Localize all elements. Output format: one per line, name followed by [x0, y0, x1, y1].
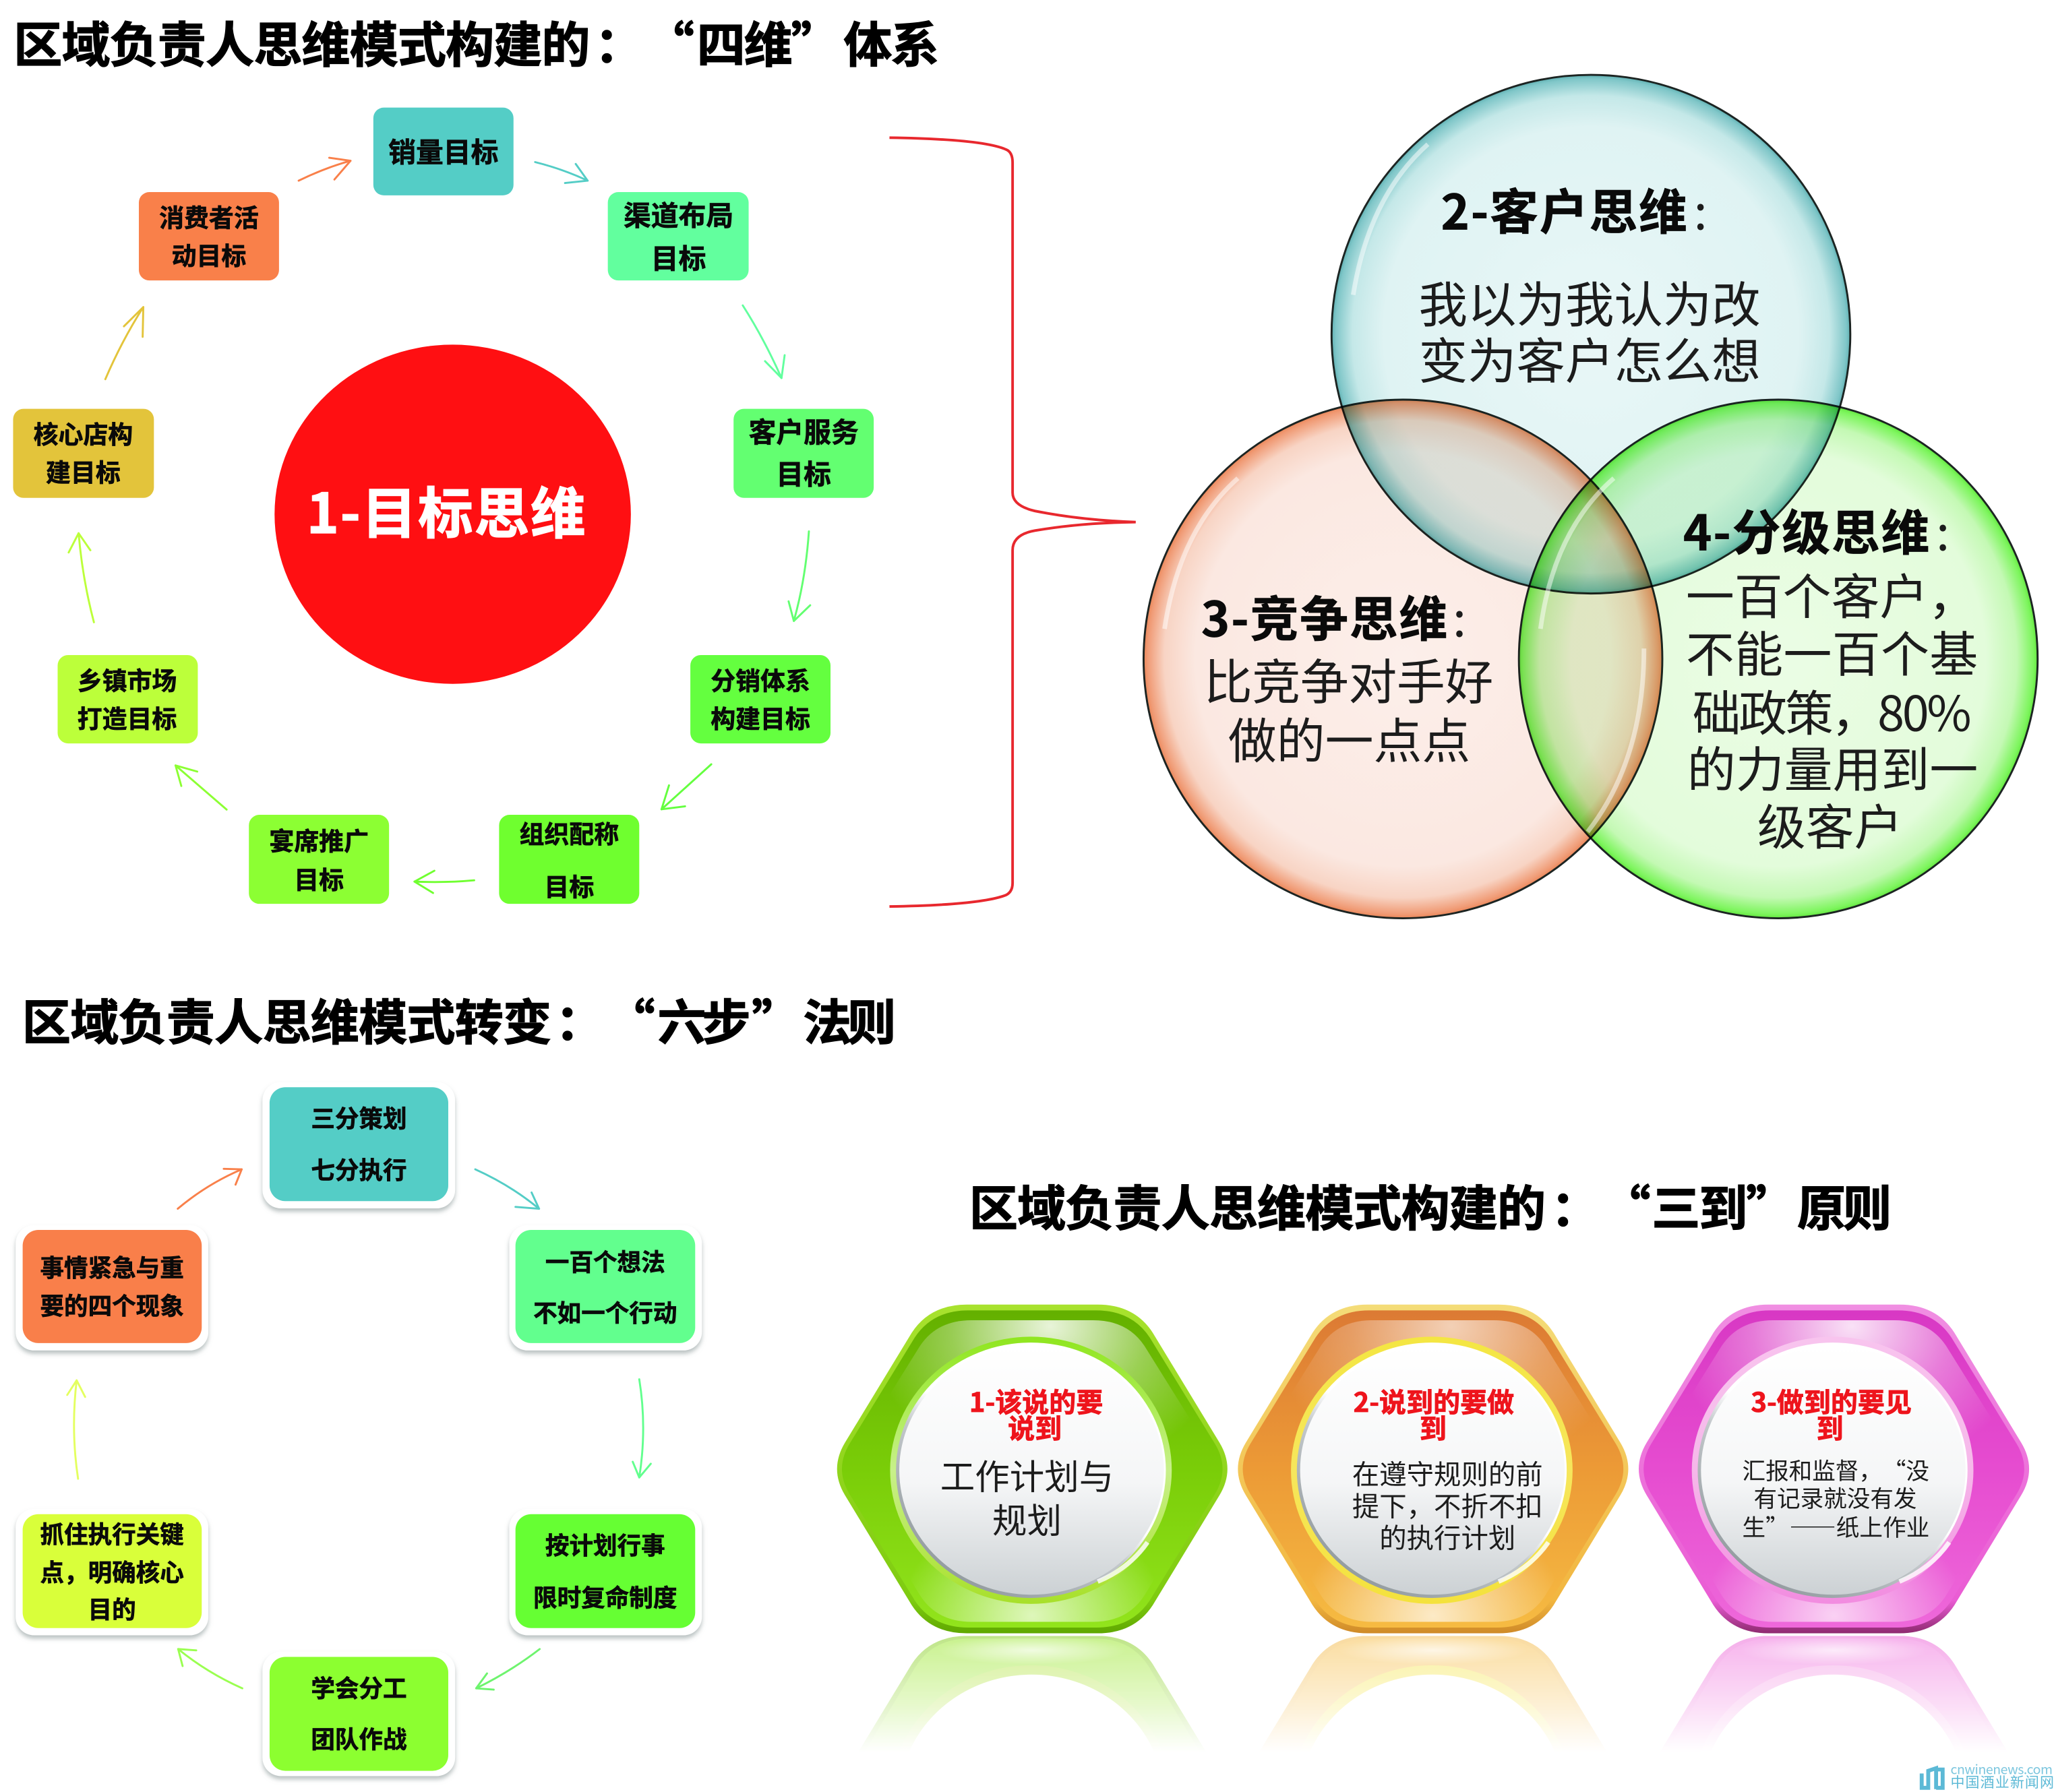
reflection: green hexagon [863, 1636, 1201, 1744]
text: tiered thinking: 级客户 [1757, 789, 1903, 859]
arrow: consumer to sales [299, 158, 351, 181]
box: plan and execute [262, 1082, 455, 1208]
text: customer thinking: 2-客户思维 [1441, 173, 1687, 243]
watermark: 中国酒业新闻网 [1950, 1772, 2054, 1792]
arrow: organisation to banquet [415, 871, 474, 893]
text: tiered thinking: 不能一百个基 [1686, 616, 1978, 686]
box: grasp key points: 点，明确核心 [40, 1554, 184, 1588]
text: tiered thinking: 4-分级思维 [1683, 494, 1929, 564]
box: distribution system target: 分销体系 [711, 660, 810, 697]
box: organisation target: 组织配称 [520, 814, 619, 851]
hexagon: done: 汇报和监督， [1743, 1452, 1882, 1486]
watermark: cnwinenews.com [1950, 1758, 2053, 1778]
watermark [1922, 1758, 2054, 1792]
title: three-arrival principle: “ [1602, 1170, 1650, 1240]
box: channel layout target: 目标 [651, 237, 706, 277]
box: core store target: 建目标 [46, 452, 121, 489]
circle: competitive thinking [1143, 400, 1662, 919]
box: act to plan: 限时复命制度 [533, 1580, 677, 1614]
reflection: orange hexagon [1265, 1636, 1601, 1743]
box: consumer activity target [139, 192, 279, 280]
panel: six-step cycle [16, 1082, 702, 1776]
arrow: step 6 to 1 [178, 1169, 242, 1209]
arrow: core store to consumer [105, 307, 144, 379]
text: tiered thinking: 的力量用到一 [1687, 731, 1978, 801]
central circle: target thinking [274, 344, 631, 684]
arrow: step 3 to 4 [476, 1649, 540, 1690]
title: four-dimension system: 体系 [843, 7, 939, 77]
box: action over ideas: 不如一个行动 [533, 1295, 677, 1329]
box: sales target: 销量目标 [388, 130, 498, 170]
box: customer service target: 目标 [776, 452, 831, 492]
hexagon: said: 提下，不折不扣 [1352, 1485, 1543, 1524]
box: act to plan [510, 1509, 702, 1635]
box: channel layout target: 渠道布局 [624, 194, 733, 234]
box: division of labour [262, 1652, 455, 1776]
text: competitive thinking: : [1453, 581, 1466, 651]
box: plan and execute: 七分执行 [311, 1152, 407, 1186]
box: distribution system target: 构建目标 [711, 699, 810, 735]
reflections [857, 1636, 2009, 1754]
title: six-step rule: 区域负责人思维模式转变 [22, 984, 551, 1054]
text: tiered thinking: 础政策，80% [1693, 675, 1972, 745]
box: organisation target [499, 814, 639, 904]
hexagon: should say: 1-该说的要 [969, 1381, 1103, 1420]
central circle: target thinking: 1-目标思维 [307, 469, 586, 549]
arrow: step 5 to 6 [67, 1380, 85, 1479]
arrow: township to core store [69, 533, 94, 622]
text: tiered thinking: 一百个客户， [1686, 559, 1976, 629]
reflection: pink hexagon [1667, 1636, 2001, 1741]
title: three-arrival principle: 区域负责人思维模式构建的 [969, 1170, 1546, 1240]
text: customer thinking: 我以为我认为改 [1419, 266, 1761, 336]
box: channel layout target [608, 192, 749, 280]
arrow: step 4 to 5 [178, 1649, 242, 1688]
box: core store target [13, 409, 154, 498]
hexagon: said: 的执行计划 [1379, 1516, 1515, 1555]
box: urgent and important: 要的四个现象 [40, 1287, 184, 1322]
arrow: banquet to township [175, 766, 226, 809]
box: township market target: 乡镇市场 [78, 660, 177, 697]
title: six-step rule: ： [555, 984, 604, 1054]
text: competitive thinking: 3-竞争思维 [1201, 581, 1447, 651]
text: tiered thinking [1683, 494, 1978, 859]
title: six-step rule: 法则 [803, 984, 896, 1054]
title: three-arrival principle: 三到 [1652, 1170, 1747, 1240]
hexagon: should say: 工作计划与 [940, 1449, 1114, 1500]
title: four-dimension system: 四维 [697, 7, 793, 77]
text: customer thinking: 变为客户怎么想 [1419, 322, 1761, 393]
hexagon: done: 有记录就没有发 [1753, 1480, 1917, 1514]
title: three-arrival principle [969, 1170, 1892, 1240]
box: division of labour: 团队作战 [311, 1721, 407, 1756]
box: customer service target [733, 409, 874, 498]
arrow: step 1 to 2 [475, 1169, 539, 1209]
arrow: sales to channel [535, 162, 588, 183]
hexagon: should say [837, 1305, 1228, 1634]
text: competitive thinking: 做的一点点 [1228, 702, 1470, 772]
arrow: distribution to organisation [661, 764, 711, 809]
hexagon: done: 3-做到的要见 [1751, 1381, 1912, 1420]
text: competitive thinking: 比竞争对手好 [1204, 644, 1493, 714]
circle: customer thinking [1331, 75, 1850, 594]
title: four-dimension system: “ [646, 7, 694, 77]
hexagon: done: 到 [1817, 1407, 1844, 1446]
box: grasp key points: 目的 [88, 1591, 136, 1626]
box: banquet promotion target [249, 815, 389, 904]
box: core store target: 核心店构 [34, 414, 133, 451]
title: six-step rule: “ [607, 984, 655, 1054]
box: urgent and important: 事情紧急与重 [40, 1249, 184, 1284]
title: six-step rule: ” [752, 984, 800, 1054]
panel: three principles [837, 1305, 2029, 1754]
title: four-dimension system: ” [791, 7, 840, 77]
hexagon: said: 到 [1420, 1407, 1447, 1446]
title: four-dimension system [13, 7, 939, 77]
title: three-arrival principle: ” [1746, 1170, 1794, 1240]
box: consumer activity target: 动目标 [172, 236, 246, 272]
title: four-dimension system: ： [595, 7, 643, 77]
box: banquet promotion target: 目标 [294, 860, 344, 896]
box: division of labour: 学会分工 [311, 1670, 407, 1704]
hexagon: said: 2-说到的要做 [1354, 1381, 1514, 1420]
title: six-step rule [22, 984, 896, 1054]
box: consumer activity target: 消费者活 [159, 198, 259, 235]
box: grasp key points: 抓住执行关键 [40, 1516, 184, 1550]
text: competitive thinking [1201, 581, 1493, 772]
arrow: service to distribution [789, 532, 810, 621]
hexagon: done: ——纸上作业 [1789, 1509, 1929, 1543]
red bracket [889, 137, 1136, 906]
box: customer service target: 客户服务 [749, 410, 859, 450]
text: tiered thinking: : [1936, 494, 1950, 564]
panel: target thinking cycle [13, 108, 874, 904]
box: banquet promotion target: 宴席推广 [269, 821, 369, 857]
glass highlights [1165, 144, 1644, 832]
hexagon: done: “没 [1883, 1452, 1929, 1486]
text: customer thinking [1419, 173, 1761, 393]
hexagon: done: 生” [1743, 1509, 1789, 1543]
hexagon: said: 在遵守规则的前 [1352, 1452, 1543, 1492]
text: customer thinking: : [1694, 173, 1708, 243]
panel: Venn diagram [1143, 75, 2038, 919]
box: act to plan: 按计划行事 [545, 1527, 665, 1562]
box: urgent and important [16, 1225, 208, 1351]
title: three-arrival principle: 原则 [1797, 1170, 1892, 1240]
box: township market target [58, 655, 198, 743]
box: plan and execute: 三分策划 [311, 1100, 407, 1134]
hexagon: said [1238, 1305, 1628, 1634]
hexagon: should say: 规划 [992, 1493, 1062, 1543]
box: sales target [373, 108, 514, 195]
box: organisation target: 目标 [544, 867, 594, 904]
arrow: step 2 to 3 [633, 1380, 651, 1477]
title: three-arrival principle: ： [1551, 1170, 1600, 1240]
box: action over ideas [510, 1225, 702, 1351]
box: township market target: 打造目标 [78, 699, 177, 735]
box: grasp key points [16, 1509, 208, 1635]
box: distribution system target [690, 655, 830, 743]
hexagon: should say: 说到 [1008, 1407, 1062, 1446]
title: six-step rule: 六步 [658, 984, 750, 1054]
title: four-dimension system: 区域负责人思维模式构建的 [13, 7, 590, 77]
circle: tiered thinking [1519, 400, 2038, 919]
box: action over ideas: 一百个想法 [545, 1243, 665, 1278]
hexagon: done [1639, 1305, 2029, 1634]
arrow: channel to service [743, 305, 785, 378]
